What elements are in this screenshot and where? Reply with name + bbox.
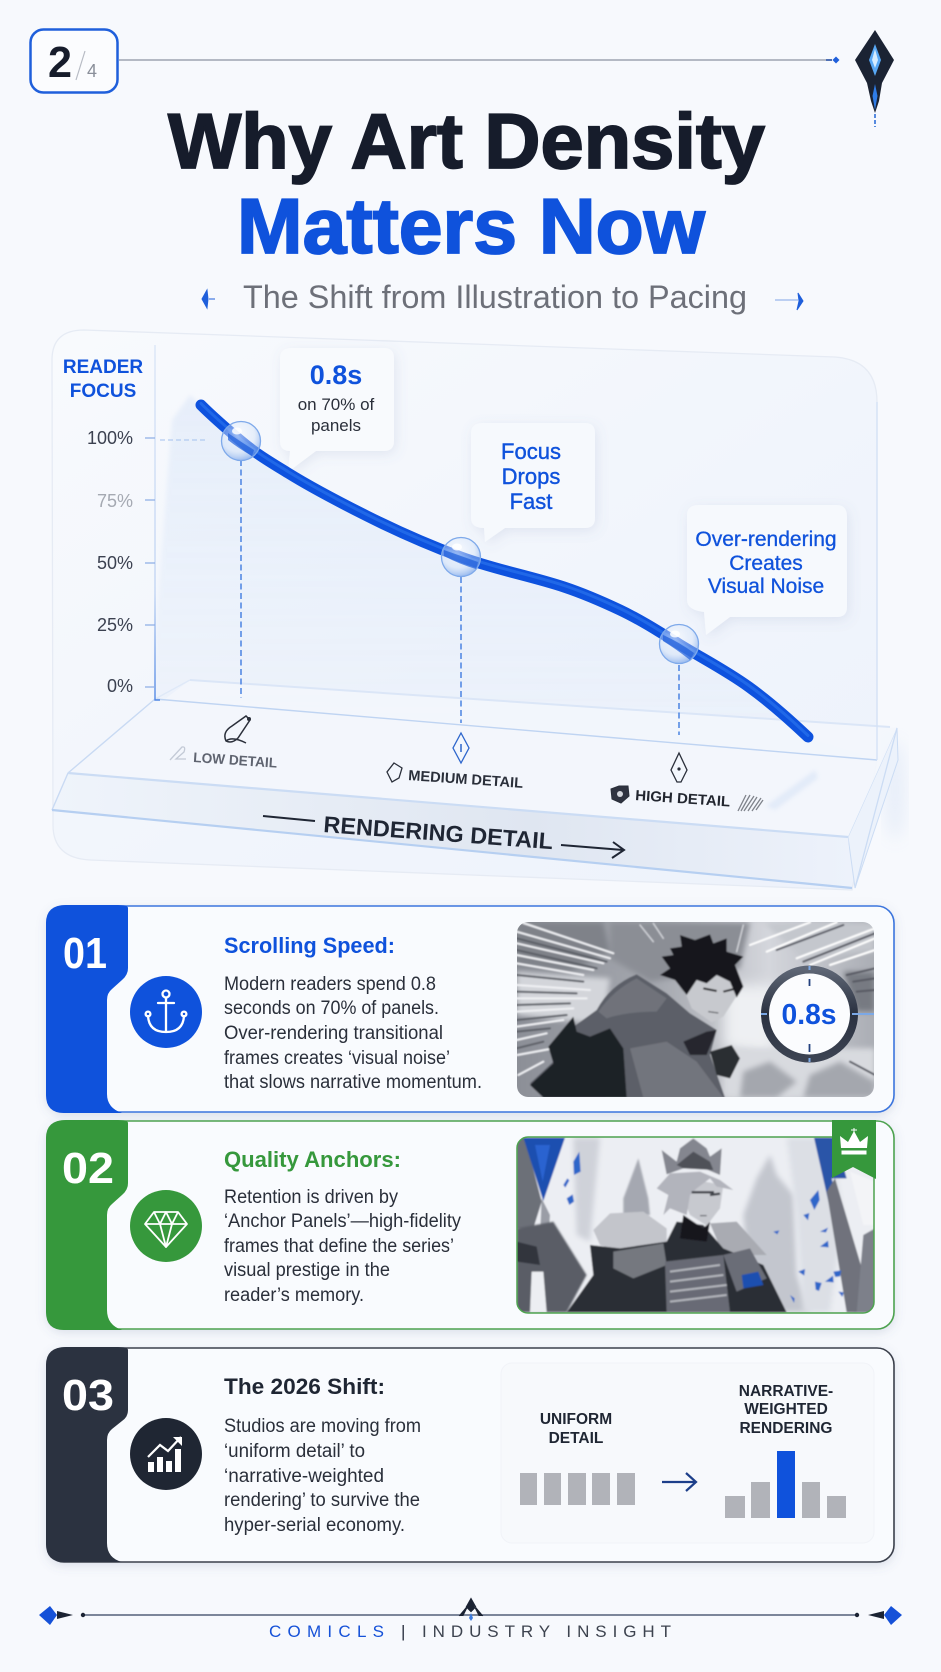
icon: rising chart xyxy=(130,1418,202,1490)
body text: frames that define the series’ xyxy=(224,1236,454,1257)
icon: pen nib ornament xyxy=(855,30,894,127)
y axis title: READER xyxy=(63,357,143,378)
backboard panel xyxy=(52,330,877,890)
dashed drop lines xyxy=(241,460,679,735)
callout: 0.8s: on 70% of xyxy=(298,395,375,414)
high detail tick xyxy=(611,753,818,811)
page badge: 2/4: 4 xyxy=(87,61,97,81)
number tab 01: 01 xyxy=(63,929,107,978)
timer dial: 0.8s xyxy=(761,966,874,1062)
body text: that slows narrative momentum. xyxy=(224,1072,482,1093)
body text: reader’s memory. xyxy=(224,1285,364,1306)
weighted bars xyxy=(725,1451,846,1518)
narrative-weighted label: RENDERING xyxy=(739,1420,833,1437)
uniform detail label: UNIFORM xyxy=(540,1411,612,1428)
uniform detail label: DETAIL xyxy=(549,1430,603,1447)
title xyxy=(168,97,765,270)
footer text: COMICLS xyxy=(269,1622,384,1641)
y axis xyxy=(145,345,208,700)
callout: focus drops fast: Drops xyxy=(502,464,560,489)
footer ornament rule xyxy=(39,1598,902,1625)
callout: 0.8s: 0.8s xyxy=(310,360,362,390)
icon: diamond xyxy=(130,1190,202,1262)
body text: rendering’ to survive the xyxy=(224,1490,420,1511)
body text: Over-rendering transitional xyxy=(224,1023,443,1044)
illustration: speed-line hero xyxy=(513,919,878,1101)
callout: focus drops fast: Fast xyxy=(510,489,552,514)
medium detail tick xyxy=(387,733,524,792)
body text: Studios are moving from xyxy=(224,1416,421,1437)
narrative-weighted label: WEIGHTED xyxy=(744,1401,828,1418)
callout: focus drops fast xyxy=(471,423,595,542)
x axis title: rendering detail: RENDERING DETAIL xyxy=(323,811,554,854)
body text xyxy=(224,974,482,1093)
x axis title: rendering detail xyxy=(263,811,624,858)
subtitle: The Shift from Illustration to Pacing xyxy=(243,279,747,315)
page badge: 2/4 xyxy=(30,30,118,92)
callout: over-rendering: Creates xyxy=(729,552,803,575)
comparison chart panel xyxy=(501,1363,874,1543)
callout: over-rendering: Visual Noise xyxy=(708,575,824,598)
page badge: 2/4: 2 xyxy=(48,38,72,87)
body text: ‘narrative-weighted xyxy=(224,1466,384,1487)
high detail tick: HIGH DETAIL xyxy=(635,788,731,810)
y axis values: 50% xyxy=(97,553,133,573)
y axis values xyxy=(87,428,133,696)
heading: Scrolling Speed: xyxy=(224,933,395,958)
y axis values: 75% xyxy=(97,491,133,511)
medium detail tick: MEDIUM DETAIL xyxy=(408,768,524,792)
footer text: INDUSTRY INSIGHT xyxy=(422,1622,671,1641)
body text: seconds on 70% of panels. xyxy=(224,998,439,1019)
number tab 02: 02 xyxy=(62,1144,114,1193)
timer dial: 0.8s: 0.8s xyxy=(782,999,836,1031)
body text: hyper-serial economy. xyxy=(224,1515,405,1536)
low detail tick xyxy=(170,716,278,771)
header rule xyxy=(119,56,840,64)
title: Why Art Density xyxy=(168,97,765,185)
body text: ‘uniform detail’ to xyxy=(224,1441,365,1462)
panel: 03 the 2026 shift xyxy=(46,1347,894,1562)
y axis values: 25% xyxy=(97,615,133,635)
shaded area below curve xyxy=(155,395,877,760)
number tab 02 xyxy=(46,1120,128,1330)
footer text: | xyxy=(401,1622,405,1641)
panel: 02 quality anchors xyxy=(46,1120,894,1330)
low detail tick: LOW DETAIL xyxy=(193,749,278,771)
number tab 03 xyxy=(46,1347,128,1562)
number tab 03: 03 xyxy=(62,1371,114,1420)
callout: focus drops fast: Focus xyxy=(501,439,561,464)
number tab 01 xyxy=(46,905,128,1113)
body text xyxy=(224,1416,421,1536)
uniform bars xyxy=(520,1473,635,1505)
callout: over-rendering: Over-rendering xyxy=(695,528,837,551)
narrative-weighted label: NARRATIVE- xyxy=(739,1383,833,1400)
title: Matters Now xyxy=(237,182,705,270)
body text: frames creates ‘visual noise’ xyxy=(224,1048,450,1069)
footer text xyxy=(269,1622,671,1641)
callout: 0.8s: panels xyxy=(311,416,361,435)
heading: Quality Anchors: xyxy=(224,1147,401,1172)
body text: Retention is driven by xyxy=(224,1187,398,1208)
callout: over-rendering xyxy=(687,505,847,635)
image frame xyxy=(517,1137,874,1313)
icon: crown bookmark xyxy=(832,1120,876,1179)
body text: visual prestige in the xyxy=(224,1260,390,1281)
focus curve xyxy=(201,404,808,737)
panel: 01 scrolling speed xyxy=(46,905,894,1113)
acrylic tray base xyxy=(52,402,905,888)
callout: 0.8s xyxy=(280,348,394,472)
y axis title: FOCUS xyxy=(70,381,136,402)
body text: Modern readers spend 0.8 xyxy=(224,974,436,995)
y axis values: 0% xyxy=(107,676,133,696)
glass bead markers xyxy=(222,422,698,664)
y axis values: 100% xyxy=(87,428,133,448)
chart: acrylic reader focus curve xyxy=(52,330,905,890)
body text: ‘Anchor Panels’—high-fidelity xyxy=(224,1211,461,1232)
illustration: crowned king xyxy=(513,1134,878,1316)
body text xyxy=(224,1187,461,1306)
icon: anchor xyxy=(130,976,202,1048)
heading: The 2026 Shift: xyxy=(224,1374,385,1399)
arrow xyxy=(662,1473,696,1491)
